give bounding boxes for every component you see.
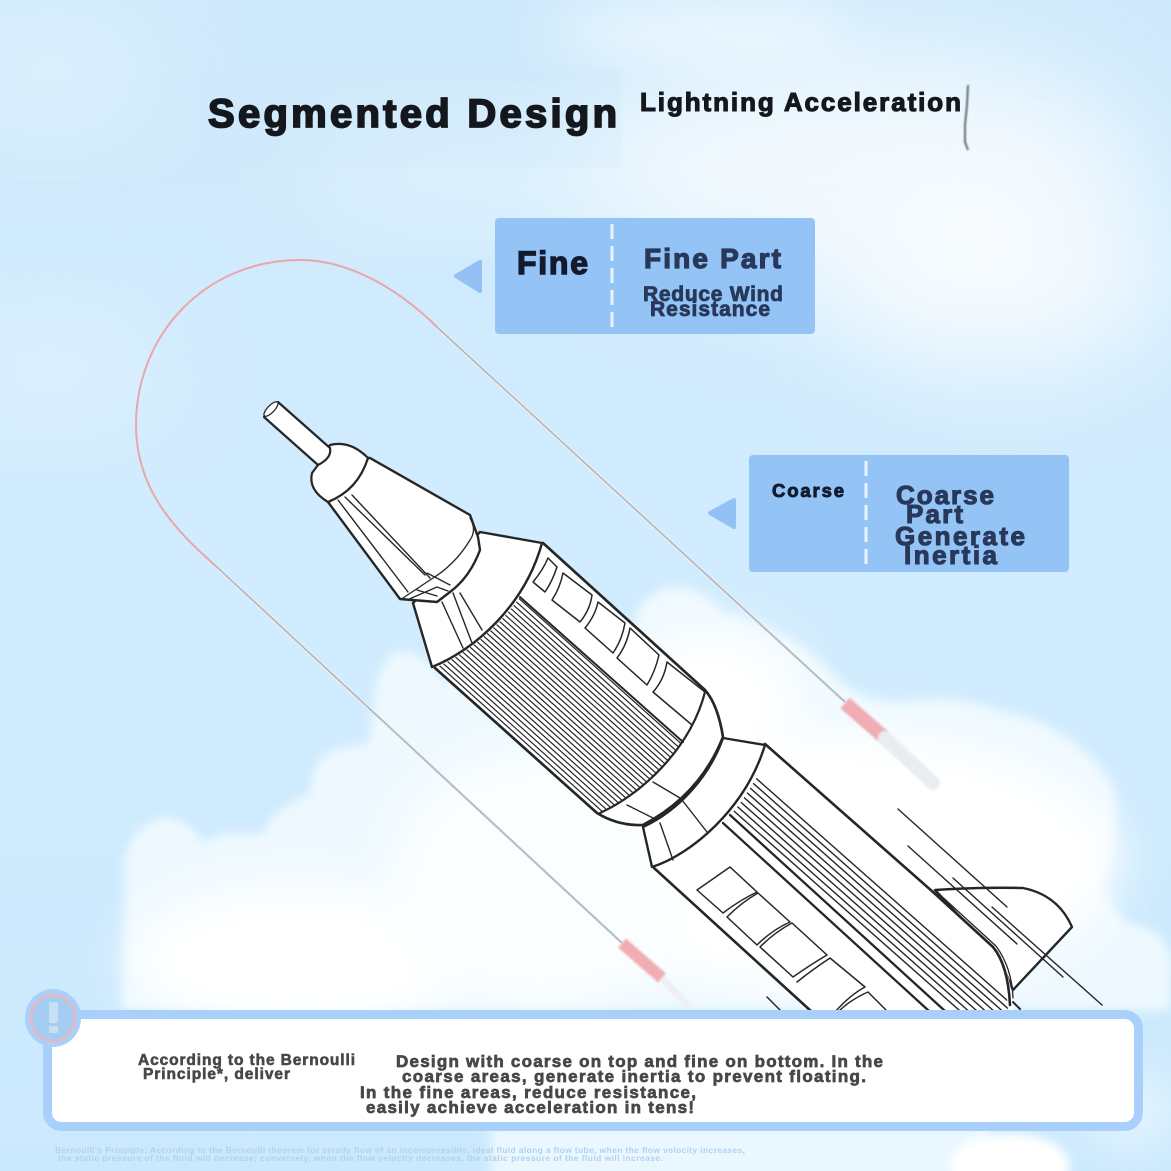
lower stage fin xyxy=(935,888,1072,990)
text: design explanation: coarse areas, generate inertia to prevent floating. xyxy=(402,1067,866,1086)
panel: fine xyxy=(495,218,815,334)
rocket illustration xyxy=(262,400,1102,1054)
title: Segmented Design xyxy=(208,92,617,136)
capsule xyxy=(311,444,368,502)
text: coarse part generate inertia: Part xyxy=(906,499,963,529)
lower ribs xyxy=(733,778,1008,1010)
text: design explanation xyxy=(360,1052,883,1117)
text: reduce wind resistance xyxy=(643,283,783,321)
label: fine: Fine xyxy=(517,245,588,281)
lower stage body xyxy=(643,738,1014,1012)
text: reduce wind resistance: Reduce Wind xyxy=(643,283,783,306)
cone xyxy=(328,458,480,602)
smudge mark beside subtitle xyxy=(965,85,968,150)
arrow: coarse xyxy=(710,500,734,527)
text: bernoulli lead: Principle*, deliver xyxy=(143,1066,290,1083)
lower collar xyxy=(643,738,765,867)
upper collar xyxy=(413,532,542,667)
text: bernoulli lead: According to the Bernoulli xyxy=(138,1052,355,1069)
text: coarse part generate inertia: Inertia xyxy=(904,540,998,570)
lower windows xyxy=(697,867,888,1012)
upper stage body xyxy=(432,543,723,825)
panel: coarse xyxy=(749,455,1069,572)
footnote: Bernoulli's Principle: According to the Bernoulli theorem for steady flow of an incompressible, ideal fluid along a flow tube, when the flow velocity increases, xyxy=(55,1145,745,1155)
text: design explanation: In the fine areas, reduce resistance, xyxy=(360,1083,696,1102)
icon: exclamation badge xyxy=(25,989,81,1047)
tip tube xyxy=(264,402,330,465)
text: design explanation: Design with coarse on top and fine on bottom. In the xyxy=(396,1052,883,1071)
label: coarse: Coarse xyxy=(772,480,844,501)
cloud body xyxy=(122,587,1171,1010)
text: coarse part generate inertia xyxy=(895,480,1025,570)
text: reduce wind resistance: Resistance xyxy=(650,298,770,321)
callout: fine xyxy=(456,218,815,334)
heading: fine part: Fine Part xyxy=(644,243,781,274)
text: bernoulli lead xyxy=(138,1052,355,1083)
flow track around the rocket xyxy=(136,260,933,1008)
text: coarse part generate inertia: Generate xyxy=(895,521,1025,551)
arrow: fine xyxy=(456,262,480,291)
bottom note panel xyxy=(25,989,1138,1126)
upper ribs xyxy=(439,598,680,812)
speed lines xyxy=(898,809,1102,1005)
cloud below panel xyxy=(490,1125,990,1171)
text: coarse part generate inertia: Coarse xyxy=(896,480,994,510)
footnote xyxy=(55,1145,745,1163)
text: design explanation: easily achieve acceleration in tens! xyxy=(366,1098,694,1117)
upper windows xyxy=(533,558,705,725)
subtitle: Lightning Acceleration xyxy=(640,87,961,117)
footnote: the static pressure of the fluid will decrease; conversely, when the flow velocity decreases, the static pressure of the fluid will increase. xyxy=(58,1153,663,1163)
callout: coarse xyxy=(710,455,1069,572)
